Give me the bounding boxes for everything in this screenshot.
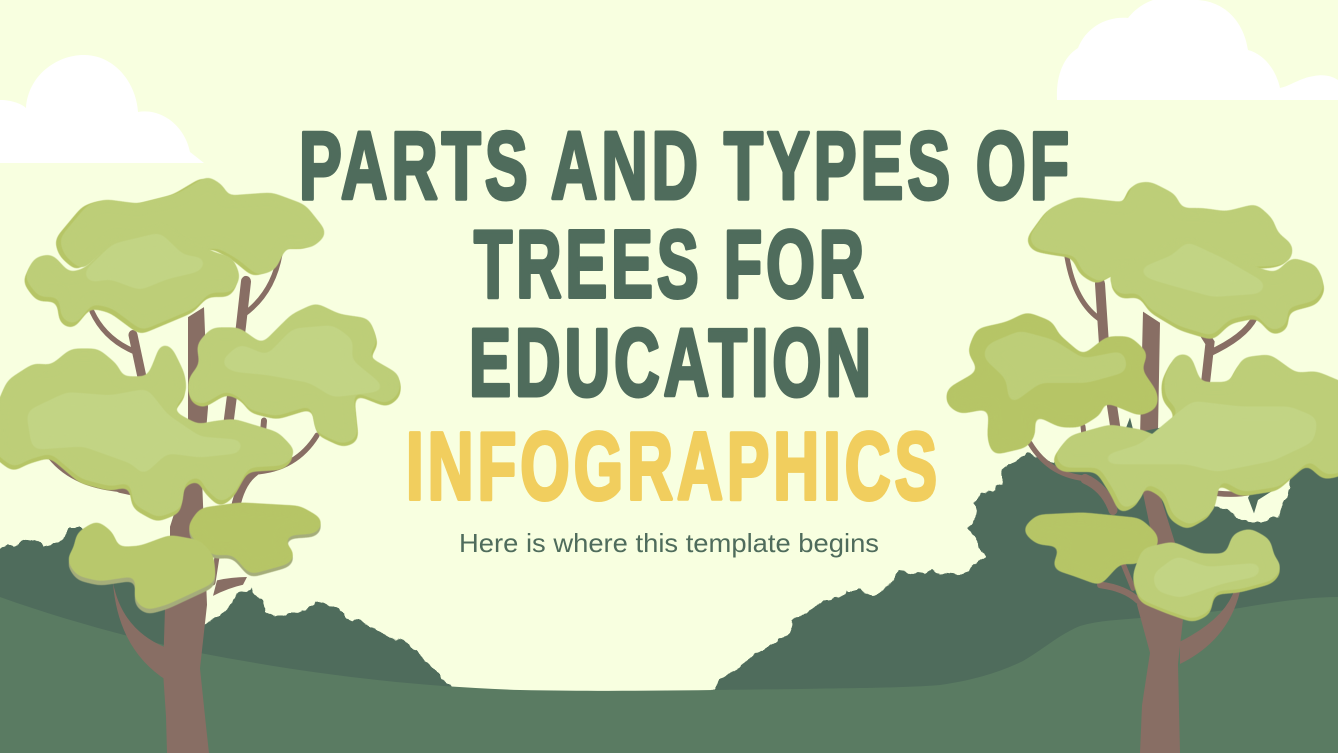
title line 3: EDUCATION xyxy=(469,310,875,416)
title xyxy=(299,112,1073,520)
left tree trunk and branches xyxy=(50,248,317,753)
left canopy: lower right xyxy=(188,503,323,577)
left canopy: lower left xyxy=(67,521,215,614)
title line 2: TREES FOR xyxy=(474,211,868,318)
left canopy: upper xyxy=(23,221,240,334)
title line 4: infographics: INFOGRAPHICS xyxy=(406,413,941,520)
right canopy: lower right xyxy=(1133,529,1282,622)
left canopy: top xyxy=(55,177,327,276)
right canopy: middle left xyxy=(947,313,1157,454)
right canopy: large xyxy=(1052,355,1338,529)
left canopy: large xyxy=(0,344,296,521)
right canopy: upper xyxy=(1109,238,1325,339)
foreground hill xyxy=(0,597,1338,753)
right tree xyxy=(947,182,1338,753)
right canopy: lower left xyxy=(1022,513,1158,585)
small palm fronds behind right tree xyxy=(1107,418,1272,513)
right canopy: top xyxy=(1026,182,1293,284)
cloud: top right xyxy=(1057,0,1338,100)
left tree xyxy=(0,177,400,753)
left bush silhouette xyxy=(0,529,453,695)
cloud: top left xyxy=(0,55,204,163)
right tree trunk and branches xyxy=(1030,257,1298,753)
right bush silhouette xyxy=(711,454,1338,700)
subtitle: Here is where this template begins xyxy=(459,528,879,558)
left canopy: middle right xyxy=(189,304,400,447)
